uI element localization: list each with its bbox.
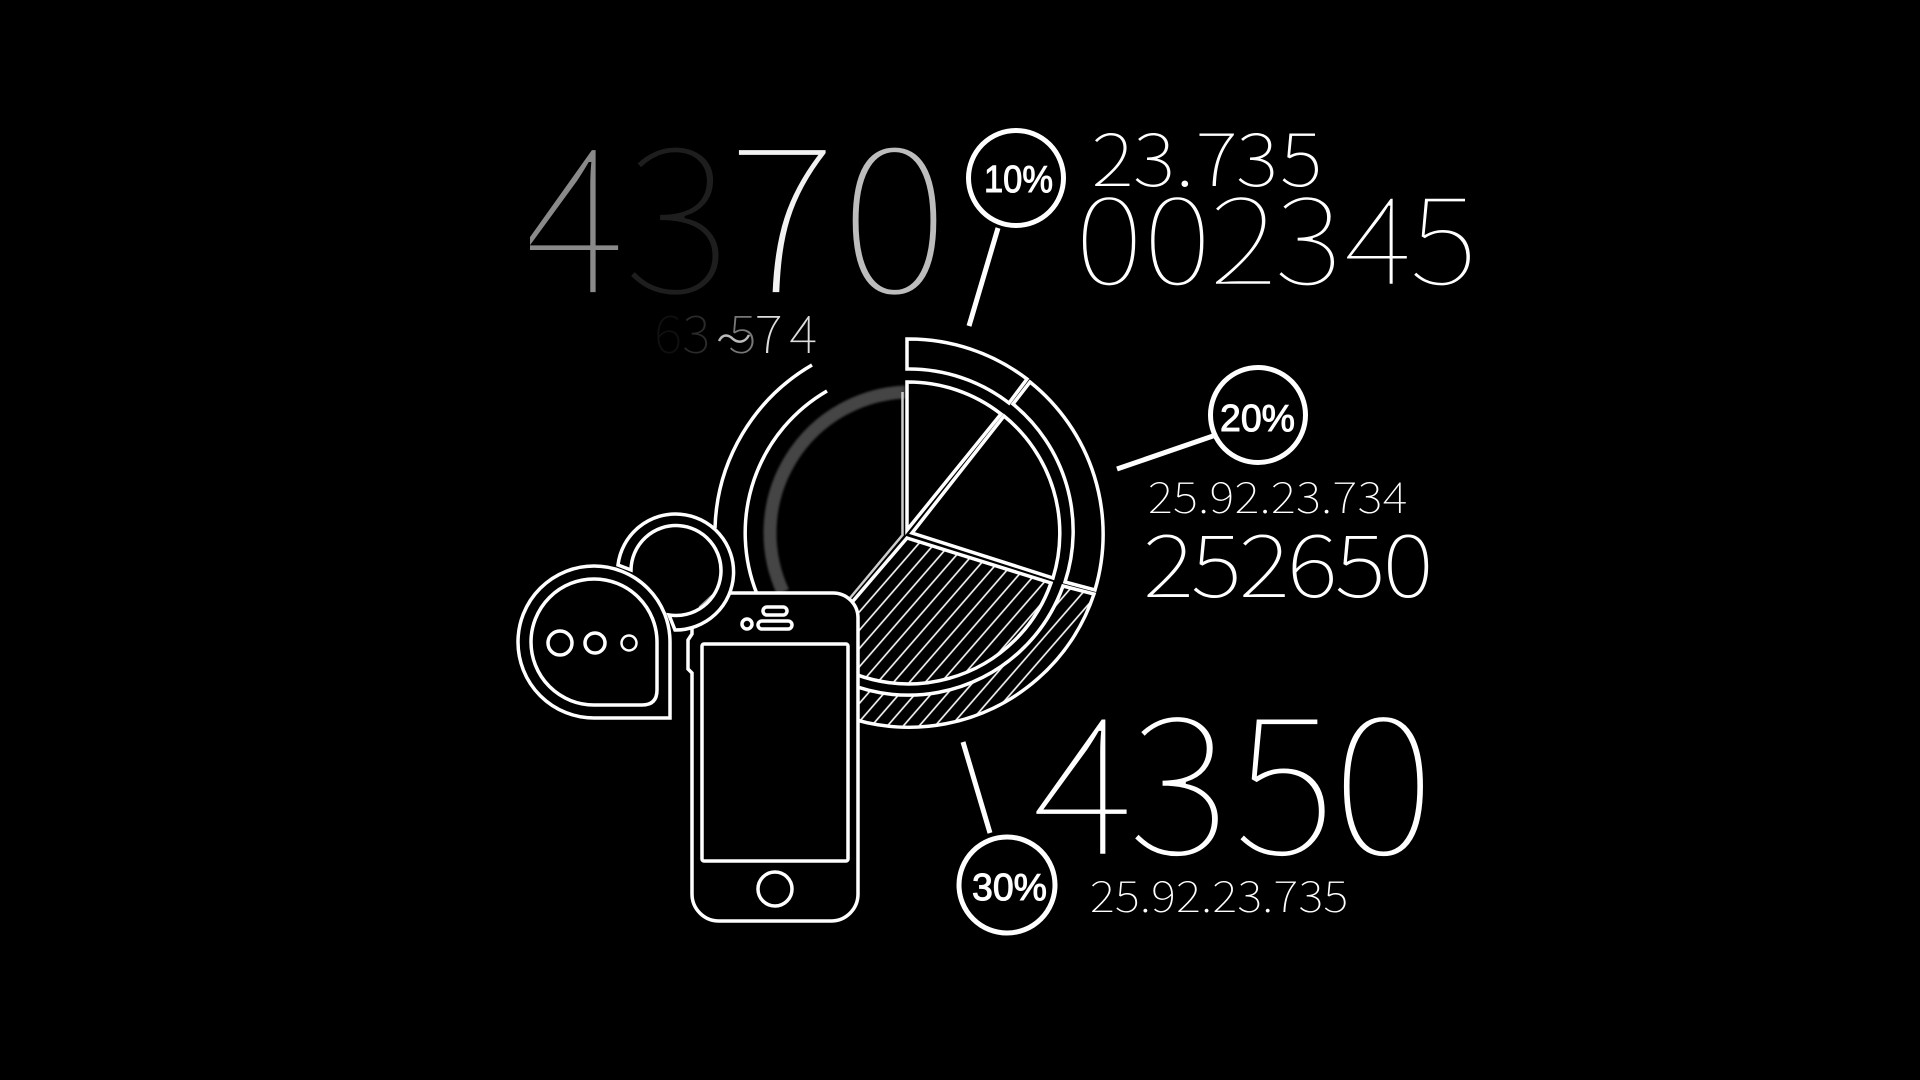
bubble outer (518, 566, 670, 718)
pie edge highlights (850, 392, 902, 598)
number: 4370 (530, 148, 936, 295)
number: 63~574: 5 (729, 294, 756, 369)
number: 23.735: 23.735 (1092, 103, 1322, 208)
outer ring segment: hatched (760, 586, 1094, 727)
callout: 10%: 10% (984, 159, 1053, 201)
dot three (622, 636, 636, 650)
callout: 20% (1117, 368, 1306, 469)
pie chart (715, 339, 1103, 727)
number: 25.92.23.734: 25.92.23.734 (1148, 464, 1408, 526)
number: 4370: 7 (728, 65, 836, 351)
callout: 20%: 20% (1220, 398, 1295, 440)
callout: 30%: 30% (972, 867, 1047, 909)
outer ring segment: right (1013, 382, 1103, 590)
left inner arc (745, 391, 827, 594)
number: 252650: 252650 (1143, 496, 1431, 622)
number: 25.92.23.735: 25.92.23.735 (1090, 863, 1348, 925)
callout: 10% (968, 130, 1064, 326)
number: 63~574: 6 (654, 294, 682, 369)
dot one (548, 631, 572, 655)
pie wedge: right (912, 416, 1060, 578)
home button (758, 872, 792, 906)
dot two (585, 633, 605, 653)
number: 4370: 0 (840, 65, 949, 351)
number: 63~574: 3 (682, 294, 710, 369)
pie wedge: top (907, 382, 1001, 530)
outer ring segment: top (907, 339, 1027, 403)
camera (742, 619, 752, 629)
number: 63~574: 4 (789, 294, 817, 369)
left outer arc (715, 365, 812, 528)
bubble inner (531, 579, 657, 705)
number: 63~574 (654, 294, 817, 369)
speaker top (763, 607, 787, 615)
icon: chat bubble (518, 566, 670, 718)
number: 002345: 002345 (1075, 148, 1478, 320)
icon: ring (618, 514, 734, 630)
grey progress arc (770, 392, 905, 592)
number: 63~574: 7 (755, 294, 783, 369)
pie wedge: hatched (812, 538, 1051, 684)
speaker bottom (758, 621, 792, 629)
number: 4370: 3 (623, 65, 731, 351)
number: 4370: 4 (518, 65, 626, 351)
phone body (688, 593, 858, 921)
callout: 30% (959, 742, 1055, 933)
icon: phone (688, 593, 858, 921)
phone screen (702, 644, 848, 861)
number: 4350: 4350 (1032, 639, 1435, 909)
